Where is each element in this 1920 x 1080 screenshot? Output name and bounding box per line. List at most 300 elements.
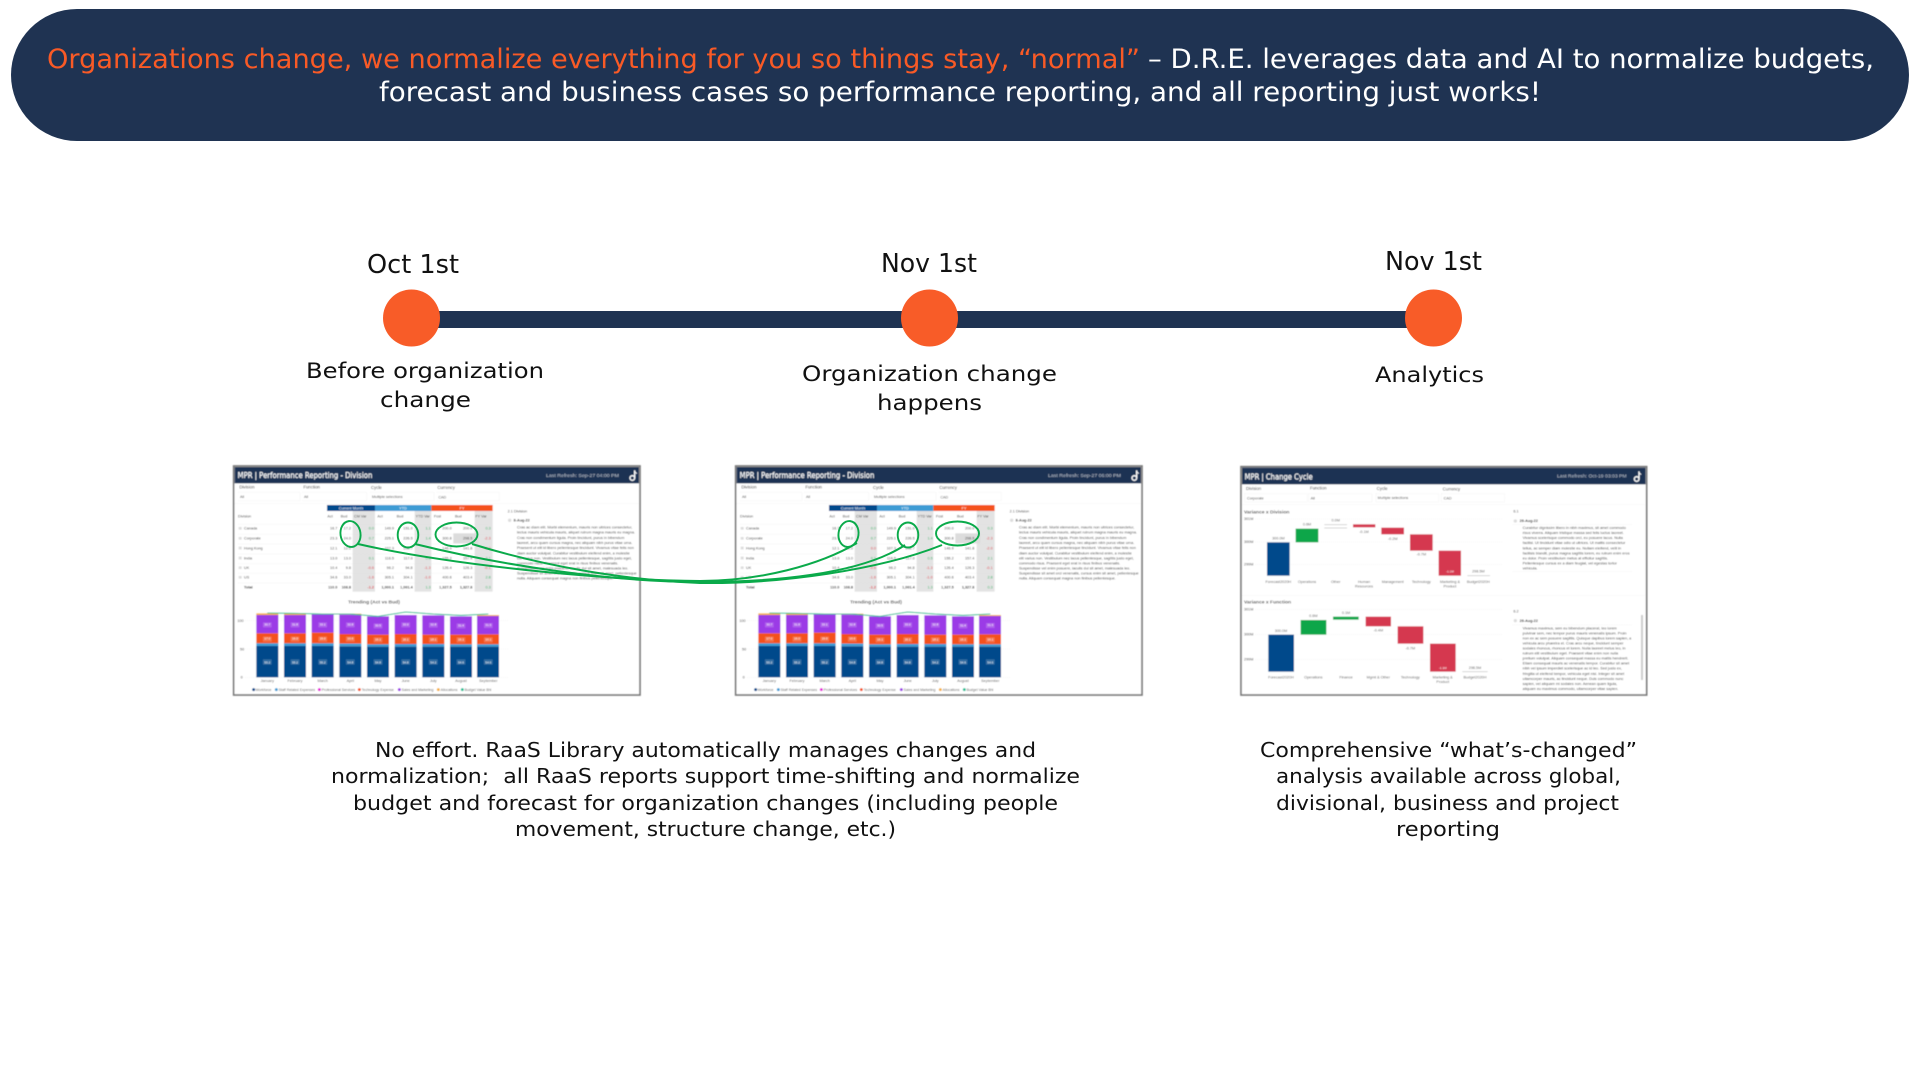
dashboard 1: performance reporting before change: 1.1 bbox=[425, 527, 431, 531]
dashboard 1: performance reporting before change: 17.2 bbox=[344, 527, 351, 531]
dashboard 2: performance reporting after change: -2.0 bbox=[986, 546, 993, 550]
dashboard 3: change cycle waterfall analytics: Budget2020H bbox=[1467, 580, 1490, 584]
dashboard 2: performance reporting after change: 94.8 bbox=[907, 566, 915, 570]
dashboard 2: performance reporting after change: 54.8 bbox=[877, 660, 883, 664]
dashboard 3: change cycle waterfall analytics: CAD bbox=[1444, 497, 1452, 501]
dashboard 2: performance reporting after change: 55.2 bbox=[794, 660, 800, 664]
dashboard 1: performance reporting before change: Hong Kong bbox=[244, 546, 263, 550]
dashboard 2: performance reporting after change: 17.2 bbox=[846, 527, 853, 531]
dashboard 2: performance reporting after change: elit varius non. Vestibulum nec lacus pellentesque, sagittis justo eget, bbox=[1019, 556, 1134, 560]
dashboard 1: performance reporting before change: 30.7 bbox=[264, 622, 271, 626]
dashboard 2: performance reporting after change: 100 bbox=[739, 619, 746, 623]
dashboard 2: performance reporting after change: 24.0 bbox=[846, 537, 853, 541]
dashboard 1: performance reporting before change: Technology Expense bbox=[362, 688, 394, 692]
dashboard 2: performance reporting after change: Budget Value Bhl bbox=[967, 688, 994, 692]
dashboard 2: performance reporting after change: -1.3 bbox=[926, 566, 933, 570]
dashboard 1: performance reporting before change: 149.9 bbox=[385, 527, 394, 531]
dashboard 2: performance reporting after change: 32.8 bbox=[849, 622, 856, 626]
dashboard 1: performance reporting before change: 18.1 bbox=[430, 637, 437, 641]
dashboard 1: performance reporting before change: 1,001.4 bbox=[400, 585, 414, 589]
dashboard 3: change cycle waterfall analytics: Variance x Function bbox=[1244, 599, 1291, 605]
dashboard 3: change cycle waterfall analytics: Finance bbox=[1339, 676, 1353, 680]
dashboard 1: performance reporting before change: 96.2 bbox=[387, 566, 394, 570]
dashboard 3: change cycle waterfall analytics: -1.1M bbox=[1446, 570, 1454, 574]
dashboard 3: change cycle waterfall analytics: Function bbox=[1310, 486, 1327, 491]
dashboard 2: performance reporting after change: -0.1 bbox=[986, 566, 993, 570]
dashboard 1: performance reporting before change: 2.8 bbox=[485, 576, 491, 580]
dashboard 2: performance reporting after change: 54.6 bbox=[987, 660, 994, 664]
dashboard 1: performance reporting before change: 110.0 bbox=[328, 585, 337, 589]
dashboard 3: change cycle waterfall analytics: 0.1M bbox=[1342, 611, 1350, 615]
dashboard 2: performance reporting after change: commodo risus. Praesent eget erat in risus finibus venenatis. bbox=[1019, 561, 1120, 565]
dashboard 1: performance reporting before change: 100 bbox=[237, 619, 244, 623]
label: before organization change bbox=[306, 359, 544, 413]
dashboard 1: performance reporting before change: 1,327.5 bbox=[439, 585, 452, 589]
dashboard 2: performance reporting after change: Allocations bbox=[943, 688, 960, 692]
dashboard 1: performance reporting before change: lectus mauris vehicula mauris, aliquet rutrum magna mauris eu magna. bbox=[517, 531, 635, 535]
dashboard 2: performance reporting after change: July bbox=[932, 679, 939, 683]
dashboard 2: performance reporting after change: 13.0 bbox=[846, 556, 853, 560]
dashboard 2: performance reporting after change: Act bbox=[879, 514, 886, 518]
dashboard 2: performance reporting after change: Hong Kong bbox=[746, 546, 765, 550]
dashboard 2: performance reporting after change: YTD bbox=[901, 507, 909, 511]
dashboard 2: performance reporting after change: 403.4 bbox=[965, 576, 974, 580]
dashboard 2: performance reporting after change: -2.3 bbox=[986, 537, 993, 541]
dashboard 1: performance reporting before change: Professional Services bbox=[322, 688, 355, 692]
dashboard 1: performance reporting before change: 304.1 bbox=[403, 576, 413, 580]
dashboard 1: performance reporting before change: 31.5 bbox=[485, 623, 492, 627]
dashboard 1: performance reporting before change: Fcst bbox=[434, 514, 442, 518]
dashboard 1: performance reporting before change: 16.1 bbox=[458, 637, 464, 641]
dashboard 2: performance reporting after change: 300.8 bbox=[944, 537, 954, 541]
dashboard 2: performance reporting after change: 0.0 bbox=[871, 527, 876, 531]
dashboard 1: performance reporting before change: 55.2 bbox=[320, 660, 326, 664]
dashboard 1: performance reporting before change: Total bbox=[244, 585, 253, 589]
dashboard 2: performance reporting after change: UK bbox=[746, 566, 752, 570]
dashboard 1: performance reporting before change: Bud bbox=[397, 514, 403, 518]
dashboard 1: performance reporting before change: Cras ac diam elit. Morbi elementum, mauris non ultrices consectetur, bbox=[517, 526, 632, 530]
dashboard 1: performance reporting before change: February bbox=[287, 679, 303, 683]
dashboard 3: change cycle waterfall analytics: risus viverra. Aliquam tristique massa sed felis luctus laoreet. bbox=[1523, 531, 1624, 535]
dashboard 1: performance reporting before change: 23.3 bbox=[330, 537, 337, 541]
dashboard 3: change cycle waterfall analytics: 6.1 bbox=[1513, 510, 1519, 514]
dashboard 2: performance reporting after change: 155.2 bbox=[944, 556, 954, 560]
dashboard 2: performance reporting after change: Fcst bbox=[936, 514, 944, 518]
dashboard 2: performance reporting after change: Total bbox=[746, 585, 755, 589]
milestone marker 1 bbox=[383, 290, 440, 346]
dashboard 2: performance reporting after change: 16.6 bbox=[849, 637, 856, 641]
dashboard 2: performance reporting after change: 1.1 bbox=[927, 527, 933, 531]
dashboard 1: performance reporting before change: 0 bbox=[241, 676, 243, 680]
dashboard 3: change cycle waterfall analytics: 298.5M bbox=[1469, 666, 1481, 670]
description: no effort: movement, structure change, etc.) bbox=[515, 817, 896, 841]
dashboard 2: performance reporting after change: 16.1 bbox=[987, 637, 994, 641]
dashboard 2: performance reporting after change: 54.6 bbox=[960, 660, 966, 664]
dashboard 2: performance reporting after change: Division bbox=[741, 485, 757, 490]
dashboard 1: performance reporting before change: March bbox=[317, 679, 328, 683]
dashboard 1: performance reporting before change: 1.4 bbox=[425, 537, 431, 541]
dashboard 1: performance reporting before change: 305.1 bbox=[385, 576, 394, 580]
dashboard 1: performance reporting before change: 126.3 bbox=[463, 566, 472, 570]
dashboard 3: change cycle waterfall analytics bbox=[1241, 467, 1647, 695]
description: comprehensive analysis: analysis available across global, bbox=[1276, 764, 1621, 788]
dashboard 1: performance reporting before change: 107.3 bbox=[385, 546, 394, 550]
dashboard 2: performance reporting after change: 141.8 bbox=[965, 546, 974, 550]
dashboard 2: performance reporting after change: 30.5 bbox=[877, 623, 883, 627]
dashboard 1: performance reporting before change: -1.3 bbox=[424, 566, 431, 570]
dashboard 1: performance reporting before change: US bbox=[244, 576, 250, 580]
dashboard 2: performance reporting after change: FY bbox=[962, 507, 967, 511]
dashboard 2: performance reporting after change: 16.1 bbox=[877, 637, 883, 641]
dashboard 2: performance reporting after change: 305.1 bbox=[887, 576, 896, 580]
dashboard 2: performance reporting after change: 200.0 bbox=[965, 527, 974, 531]
dashboard 2: performance reporting after change: 0.3 bbox=[987, 527, 993, 531]
dashboard 1: performance reporting before change: Budget Value Bhl bbox=[465, 688, 492, 692]
dashboard 3: change cycle waterfall analytics: Technology bbox=[1412, 580, 1431, 584]
dashboard 2: performance reporting after change: 54.2 bbox=[932, 660, 939, 664]
dashboard 2: performance reporting after change: 54.8 bbox=[849, 660, 856, 664]
dashboard 1: performance reporting before change: 298.5 bbox=[463, 537, 472, 541]
description: comprehensive analysis: divisional, business and project bbox=[1276, 791, 1619, 815]
dashboard 1: performance reporting before change: June bbox=[402, 679, 410, 683]
dashboard 1: performance reporting before change: Staff Related Expenses bbox=[279, 688, 315, 692]
dashboard 2: performance reporting after change: 16.1 bbox=[905, 637, 911, 641]
dashboard 3: change cycle waterfall analytics: 301M bbox=[1244, 607, 1253, 611]
dashboard 2: performance reporting after change: 34.6 bbox=[832, 576, 839, 580]
dashboard 2: performance reporting after change: 110.0 bbox=[830, 585, 839, 589]
dashboard 2: performance reporting after change: Bud bbox=[957, 514, 964, 518]
dashboard 1: performance reporting before change: -1.0 bbox=[424, 576, 431, 580]
dashboard 1: performance reporting before change: 1,000.1 bbox=[381, 585, 394, 589]
dashboard 1: performance reporting before change: Trending (Act vs Bud) bbox=[348, 600, 400, 606]
banner text line 1 white: – D.R.E. leverages data and AI to normalize budgets, bbox=[1148, 44, 1874, 75]
dashboard 3: change cycle waterfall analytics: 300.0M bbox=[1275, 629, 1287, 633]
dashboard 3: change cycle waterfall analytics: Human bbox=[1358, 580, 1370, 584]
dashboard 2: performance reporting after change: Currency bbox=[939, 485, 958, 490]
dashboard 2: performance reporting after change: Cras ac diam elit. Morbi elementum, mauris non ultrices consectetur, bbox=[1019, 526, 1134, 530]
dashboard 2: performance reporting after change: Multiple selections bbox=[874, 495, 905, 499]
dashboard 2: performance reporting after change: August bbox=[957, 679, 970, 683]
dashboard 1: performance reporting before change: 16.7 bbox=[330, 527, 337, 531]
dashboard 3: change cycle waterfall analytics: aliquam eu maximus commodo, ullamcorper vitae sapien. bbox=[1523, 687, 1618, 691]
dashboard 1: performance reporting before change: 54.8 bbox=[403, 660, 409, 664]
dashboard 1: performance reporting before change: Currency bbox=[437, 485, 456, 490]
dashboard 1: performance reporting before change: September bbox=[479, 679, 498, 683]
dashboard 2: performance reporting after change: June bbox=[904, 679, 912, 683]
dashboard 1: performance reporting before change: 31.4 bbox=[458, 623, 464, 627]
dashboard 2: performance reporting after change: 1,327.5 bbox=[941, 585, 954, 589]
dashboard 2: performance reporting after change: -0.6 bbox=[870, 566, 876, 570]
dashboard 2: performance reporting after change: 146.9 bbox=[944, 546, 954, 550]
dashboard 2: performance reporting after change: 149.9 bbox=[887, 527, 896, 531]
dashboard 1: performance reporting before change: 55.2 bbox=[264, 660, 271, 664]
dashboard 3: change cycle waterfall analytics: facilisis blandit, purus magna sagittis lorem, eu rutrum enim eros bbox=[1523, 551, 1630, 555]
dashboard 1: performance reporting before change: 54.6 bbox=[485, 660, 492, 664]
dashboard 1: performance reporting before change: Sales and Marketing bbox=[402, 688, 433, 692]
milestone marker 2 bbox=[901, 290, 958, 346]
dashboard 1: performance reporting before change: Division bbox=[238, 514, 251, 518]
dashboard 1: performance reporting before change: Function bbox=[303, 485, 321, 490]
dashboard 2: performance reporting after change: 126.3 bbox=[965, 566, 974, 570]
dashboard 2: performance reporting after change: -1.2 bbox=[870, 585, 876, 589]
dashboard 1: performance reporting before change: 17.0 bbox=[264, 637, 271, 641]
dashboard 1: performance reporting before change: India bbox=[244, 556, 253, 560]
dashboard 2: performance reporting after change: Current Month bbox=[841, 507, 865, 511]
dashboard 2: performance reporting after change: 16.7 bbox=[832, 527, 839, 531]
dashboard 1: performance reporting before change: YTD Var bbox=[416, 514, 431, 518]
dashboard 3: change cycle waterfall analytics: 300M bbox=[1244, 632, 1253, 636]
dashboard 1: performance reporting before change: Canada bbox=[244, 527, 258, 531]
dashboard 3: change cycle waterfall analytics: 0.0M bbox=[1331, 519, 1340, 523]
dashboard 1: performance reporting before change: Cycle bbox=[371, 485, 382, 490]
dashboard 3: change cycle waterfall analytics: Curabitur dignissim libero in nibh maximus, sit amet commodo bbox=[1523, 526, 1626, 530]
dashboard 2: performance reporting after change: 2.8 bbox=[987, 576, 993, 580]
label: organization change happens bbox=[802, 362, 1057, 416]
dashboard 2: performance reporting after change: Praesent ut elit id libero pellentesque tincidunt. Vivamus vitae felis non bbox=[1019, 546, 1136, 550]
dashboard 1: performance reporting before change: 33.1 bbox=[320, 622, 326, 626]
dashboard 2: performance reporting after change: 304.1 bbox=[905, 576, 915, 580]
dashboard 1: performance reporting before change: 141.8 bbox=[463, 546, 472, 550]
dashboard 1: performance reporting before change: 31.8 bbox=[292, 622, 298, 626]
dashboard 1: performance reporting before change: 13.0 bbox=[330, 556, 337, 560]
banner text line 1 orange: Organizations change, we normalize everything for you so things stay, “normal” bbox=[47, 44, 1140, 75]
dashboard 2: performance reporting after change: 157.4 bbox=[965, 556, 974, 560]
dashboard 2: performance reporting after change: Workforce bbox=[758, 688, 774, 692]
dashboard 2: performance reporting after change: 31.5 bbox=[987, 623, 994, 627]
dashboard 3: change cycle waterfall analytics: 26-Aug-22 bbox=[1520, 619, 1538, 623]
dashboard 2: performance reporting after change: Staff Related Expenses bbox=[781, 688, 817, 692]
dashboard 2: performance reporting after change: Division bbox=[740, 514, 753, 518]
dashboard 3: change cycle waterfall analytics: ullamcorper mauris, ac tincidunt neque. Duis commodo nunc bbox=[1523, 677, 1623, 681]
dashboard 2: performance reporting after change: 151.0 bbox=[905, 527, 915, 531]
dashboard 1: performance reporting before change: Act bbox=[377, 514, 384, 518]
dashboard 3: change cycle waterfall analytics: Technology bbox=[1401, 676, 1420, 680]
dashboard 1: performance reporting before change: 30.5 bbox=[375, 623, 381, 627]
dashboard 1: performance reporting before change: Suspendisse sit amet orci venenatis, cursus enim sit amet, pellentesque bbox=[517, 572, 637, 576]
dashboard 3: change cycle waterfall analytics: sodales rhoncus, rhoncus et lorem. Nulla laoreet metus leo, in bbox=[1523, 646, 1625, 650]
dashboard 3: change cycle waterfall analytics: fringilla ut eleifend tempor, vehicula eget nisi. Integer sit amet bbox=[1523, 672, 1625, 676]
dashboard 2: performance reporting after change: 12.1 bbox=[832, 546, 839, 550]
dashboard 2: performance reporting after change: Act bbox=[829, 514, 836, 518]
dashboard 1: performance reporting before change: Workforce bbox=[256, 688, 272, 692]
dashboard 1: performance reporting before change: 200.0 bbox=[442, 527, 452, 531]
dashboard 2: performance reporting after change: 0.3 bbox=[987, 585, 993, 589]
description: no effort: budget and forecast for organization changes (including people bbox=[353, 791, 1058, 815]
dashboard 1: performance reporting before change: Praesent ut elit id libero pellentesque tincidunt. Vivamus vitae felis non bbox=[517, 546, 634, 550]
dashboard 2: performance reporting after change: Function bbox=[805, 485, 823, 490]
dashboard 1: performance reporting before change: 2.1 Division bbox=[508, 509, 527, 513]
dashboard 1: performance reporting before change: 33.0 bbox=[344, 576, 351, 580]
dashboard 1: performance reporting before change: -1.2 bbox=[368, 585, 374, 589]
dashboard 1: performance reporting before change: 16.1 bbox=[485, 637, 492, 641]
dashboard 2: performance reporting after change: -1.6 bbox=[870, 576, 876, 580]
dashboard 1: performance reporting before change: -2.3 bbox=[484, 537, 491, 541]
dashboard 1: performance reporting before change: 16.1 bbox=[403, 637, 409, 641]
dashboard 2: performance reporting after change: 108.7 bbox=[905, 546, 915, 550]
dashboard 2: performance reporting after change: 33.1 bbox=[822, 622, 828, 626]
dashboard 1: performance reporting before change: 126.4 bbox=[442, 566, 452, 570]
dashboard 1: performance reporting before change: Division bbox=[239, 485, 255, 490]
dashboard 1: performance reporting before change: 12.0 bbox=[344, 546, 351, 550]
dashboard 1: performance reporting before change: 0.3 bbox=[485, 527, 491, 531]
label: analytics: Analytics bbox=[1375, 363, 1484, 388]
dashboard 2: performance reporting after change: 19.0 bbox=[822, 637, 828, 641]
dashboard 1: performance reporting before change: Bud bbox=[455, 514, 462, 518]
dashboard 1: performance reporting before change: 32.8 bbox=[347, 622, 354, 626]
dashboard 3: change cycle waterfall analytics: Vivamus scelerisque commodo orci, eu posuere lacus. Nulla bbox=[1523, 536, 1624, 540]
dashboard 1: performance reporting before change: July bbox=[430, 679, 437, 683]
dashboard 1: performance reporting before change: 16.1 bbox=[375, 637, 381, 641]
dashboard 1: performance reporting before change: 1,327.8 bbox=[460, 585, 472, 589]
dashboard 1: performance reporting before change: Suspendisse vel enim posuere, iaculis dui sit amet, malesuada leo. bbox=[517, 567, 628, 571]
dashboard 3: change cycle waterfall analytics: Last Refresh: Oct-19 03:03 PM bbox=[1557, 474, 1627, 479]
dashboard 2: performance reporting after change: India bbox=[746, 556, 755, 560]
dashboard 1: performance reporting before change: 16.6 bbox=[347, 637, 354, 641]
dashboard 2: performance reporting after change: 1.3 bbox=[927, 585, 933, 589]
description: comprehensive analysis bbox=[1260, 738, 1637, 841]
dashboard 1: performance reporting before change: -0.1 bbox=[484, 566, 491, 570]
dashboard 2: performance reporting after change: 12.0 bbox=[846, 546, 853, 550]
dashboard 3: change cycle waterfall analytics: -0.7M bbox=[1417, 553, 1426, 557]
dashboard 3: change cycle waterfall analytics: Currency bbox=[1443, 486, 1461, 491]
dashboard 3: change cycle waterfall analytics: Forecast2020H bbox=[1266, 580, 1291, 584]
dashboard 3: change cycle waterfall analytics: Marketing & bbox=[1440, 580, 1460, 584]
dashboard 1: performance reporting before change: Allocations bbox=[441, 688, 458, 692]
dashboard 3: change cycle waterfall analytics: 300.0M bbox=[1272, 537, 1285, 541]
dashboard 2: performance reporting after change: 116.5 bbox=[887, 556, 896, 560]
dashboard 1: performance reporting before change: 94.8 bbox=[405, 566, 413, 570]
dashboard 2: performance reporting after change: Cras non condimentum ligula. Proin tincidunt, purus in bibendum bbox=[1019, 536, 1126, 540]
dashboard 3: change cycle waterfall analytics: -0.4M bbox=[1374, 629, 1383, 633]
dashboard 3: change cycle waterfall analytics: Product bbox=[1444, 585, 1457, 589]
dashboard 2: performance reporting after change: CAD bbox=[940, 495, 949, 499]
dashboard 3: change cycle waterfall analytics: Pellentesque cursus ex a diam feugiat, vel egestas tortor bbox=[1523, 561, 1618, 565]
dashboard 3: change cycle waterfall analytics: 299M bbox=[1244, 562, 1253, 566]
date: Nov 1st analytics: Nov 1st bbox=[1385, 247, 1482, 277]
dashboard 2: performance reporting after change: 18.1 bbox=[932, 637, 939, 641]
dashboard 2: performance reporting after change: 32.8 bbox=[932, 623, 939, 627]
dashboard 2: performance reporting after change: 1,001.4 bbox=[902, 585, 916, 589]
dashboard 3: change cycle waterfall analytics: pretium volutpat. Aliquam consequat massa eu mattis hendrerit. bbox=[1523, 657, 1628, 661]
dashboard 1: performance reporting before change: 226.5 bbox=[403, 537, 413, 541]
dashboard 2: performance reporting after change bbox=[736, 466, 1142, 695]
dashboard 2: performance reporting after change: YTD Var bbox=[918, 514, 933, 518]
dashboard 2: performance reporting after change: 226.5 bbox=[905, 537, 915, 541]
dashboard 1: performance reporting before change: 55.2 bbox=[292, 660, 298, 664]
dashboard 1: performance reporting before change: 200.0 bbox=[463, 527, 472, 531]
dashboard 1: performance reporting before change: May bbox=[374, 679, 382, 683]
dashboard 1: performance reporting before change: Cras non condimentum ligula. Proin tincidunt, purus in bibendum bbox=[517, 536, 624, 540]
dashboard 1: performance reporting before change: August bbox=[455, 679, 468, 683]
dashboard 1: performance reporting before change: 116.5 bbox=[385, 556, 394, 560]
dashboard 2: performance reporting after change: 16.0 bbox=[794, 637, 800, 641]
dashboard 3: change cycle waterfall analytics: Mgmt & Other bbox=[1367, 676, 1391, 680]
dashboard 1: performance reporting before change: -2.0 bbox=[484, 546, 491, 550]
dashboard 3: change cycle waterfall analytics: 6.2 bbox=[1513, 610, 1519, 614]
dashboard 2: performance reporting after change: laoreet, arcu quam cursus magna, nec aliquam nibh purus vitae urna. bbox=[1019, 541, 1134, 545]
dashboard 1: performance reporting before change: FY Var bbox=[475, 514, 487, 518]
dashboard 3: change cycle waterfall analytics: 0.6M bbox=[1309, 614, 1318, 618]
dashboard 1: performance reporting before change: -0.6 bbox=[368, 566, 374, 570]
dashboard 2: performance reporting after change: 31.8 bbox=[794, 622, 800, 626]
dashboard 2: performance reporting after change: 30.7 bbox=[766, 622, 773, 626]
dashboard 2: performance reporting after change: 33.0 bbox=[846, 576, 853, 580]
dashboard 3: change cycle waterfall analytics: Vivamus maximus, sem eu bibendum placerat, leo lorem bbox=[1523, 626, 1617, 630]
dashboard 2: performance reporting after change: 117.0 bbox=[906, 556, 915, 560]
dashboard 2: performance reporting after change: February bbox=[789, 679, 805, 683]
dashboard 1: performance reporting before change: Current Month bbox=[339, 507, 363, 511]
dashboard 3: change cycle waterfall analytics: tellus, ac semper diam molestie eu. Nullam eleifend, velit in bbox=[1523, 546, 1621, 550]
dashboard 2: performance reporting after change: 400.6 bbox=[944, 576, 954, 580]
dashboard 3: change cycle waterfall analytics: Multiple selections bbox=[1378, 496, 1408, 500]
dashboard 3: change cycle waterfall analytics: Division bbox=[1246, 486, 1262, 491]
dashboard 1: performance reporting before change: 0.7 bbox=[369, 537, 374, 541]
date: Oct 1st: Oct 1st bbox=[367, 250, 459, 280]
dashboard 1: performance reporting before change: YTD bbox=[399, 507, 407, 511]
dashboard 1: performance reporting before change: 13.0 bbox=[344, 556, 351, 560]
dashboard 2: performance reporting after change: Sales and Marketing bbox=[904, 688, 935, 692]
milestone marker 3 bbox=[1405, 290, 1462, 346]
date: Nov 1st: Nov 1st bbox=[881, 249, 977, 279]
dashboard 1: performance reporting before change: Multiple selections bbox=[372, 495, 403, 499]
dashboard 1: performance reporting before change: 33.0 bbox=[403, 622, 409, 626]
dashboard 2: performance reporting after change: May bbox=[876, 679, 884, 683]
dashboard 2: performance reporting after change: 0.5 bbox=[927, 556, 933, 560]
dashboard 1: performance reporting before change: UK bbox=[244, 566, 250, 570]
dashboard 3: change cycle waterfall analytics: Product bbox=[1436, 680, 1450, 684]
dashboard 1: performance reporting before change: 108.8 bbox=[342, 585, 351, 589]
label: before organization change: change bbox=[380, 388, 471, 413]
dashboard 2: performance reporting after change: 55.2 bbox=[822, 660, 828, 664]
dashboard 2: performance reporting after change: Canada bbox=[746, 527, 760, 531]
dashboard 2: performance reporting after change: Suspendisse vel enim posuere, iaculis dui sit amet, malesuada leo. bbox=[1019, 567, 1130, 571]
dashboard 3: change cycle waterfall analytics: rutrum elit vestibulum eget. Praesent vitae enim non nulla bbox=[1523, 652, 1619, 656]
dashboard 3: change cycle waterfall analytics: sapien, vel aliquam mi sodales non. Aenean quam ligula, bbox=[1523, 682, 1617, 686]
dashboard 1: performance reporting before change: 157.4 bbox=[463, 556, 472, 560]
dashboard 2: performance reporting after change: 9.8 bbox=[848, 566, 853, 570]
dashboard 2: performance reporting after change: MPR | Performance Reporting - Division bbox=[740, 471, 874, 480]
dashboard 2: performance reporting after change: March bbox=[819, 679, 830, 683]
label: organization change happens: Organization change bbox=[802, 362, 1057, 387]
dashboard 3: change cycle waterfall analytics: 301M bbox=[1244, 517, 1253, 521]
dashboard 2: performance reporting after change: 2.1 Division bbox=[1010, 509, 1029, 513]
dashboard 1: performance reporting before change: 24.0 bbox=[344, 537, 351, 541]
dashboard 1: performance reporting before change: Corporate bbox=[244, 537, 261, 541]
label: organization change happens: happens bbox=[877, 391, 982, 416]
dashboard 1: performance reporting before change: 54.8 bbox=[347, 660, 354, 664]
dashboard 1: performance reporting before change: 32.8 bbox=[430, 623, 437, 627]
dashboard 2: performance reporting after change: 0.1 bbox=[871, 556, 876, 560]
dashboard 3: change cycle waterfall analytics: Operations bbox=[1298, 580, 1316, 584]
dashboard 3: change cycle waterfall analytics: MPR | Change Cycle bbox=[1245, 472, 1313, 481]
dashboard 2: performance reporting after change: 2.1 bbox=[987, 556, 993, 560]
dashboard 3: change cycle waterfall analytics: Cycle bbox=[1377, 486, 1388, 491]
dashboard 2: performance reporting after change: Trending (Act vs Bud) bbox=[850, 600, 902, 606]
dashboard 2: performance reporting after change: Last Refresh: Sep-27 06:00 PM bbox=[1048, 473, 1121, 478]
dashboard 2: performance reporting after change: 8-Aug-22 bbox=[1016, 519, 1032, 523]
dashboard 2: performance reporting after change: January bbox=[763, 679, 776, 683]
dashboard 1: performance reporting before change: 9.8 bbox=[346, 566, 351, 570]
dashboard 3: change cycle waterfall analytics: eu dolor. Proin vestibulum metus at efficitur sagittis. bbox=[1523, 556, 1608, 560]
dashboard 1: performance reporting before change: diam auctor volutpat. Curabitur vestibulum eleifend enim, a molestie bbox=[517, 551, 630, 555]
description: comprehensive analysis: reporting bbox=[1396, 817, 1500, 841]
dashboard 2: performance reporting after change: 31.4 bbox=[960, 623, 966, 627]
dashboard 1: performance reporting before change: 0.1 bbox=[369, 556, 374, 560]
dashboard 3: change cycle waterfall analytics: Management bbox=[1382, 580, 1405, 584]
description: no effort bbox=[331, 738, 1080, 841]
dashboard 2: performance reporting after change: FY Var bbox=[977, 514, 989, 518]
dashboard 2: performance reporting after change: Professional Services bbox=[824, 688, 857, 692]
